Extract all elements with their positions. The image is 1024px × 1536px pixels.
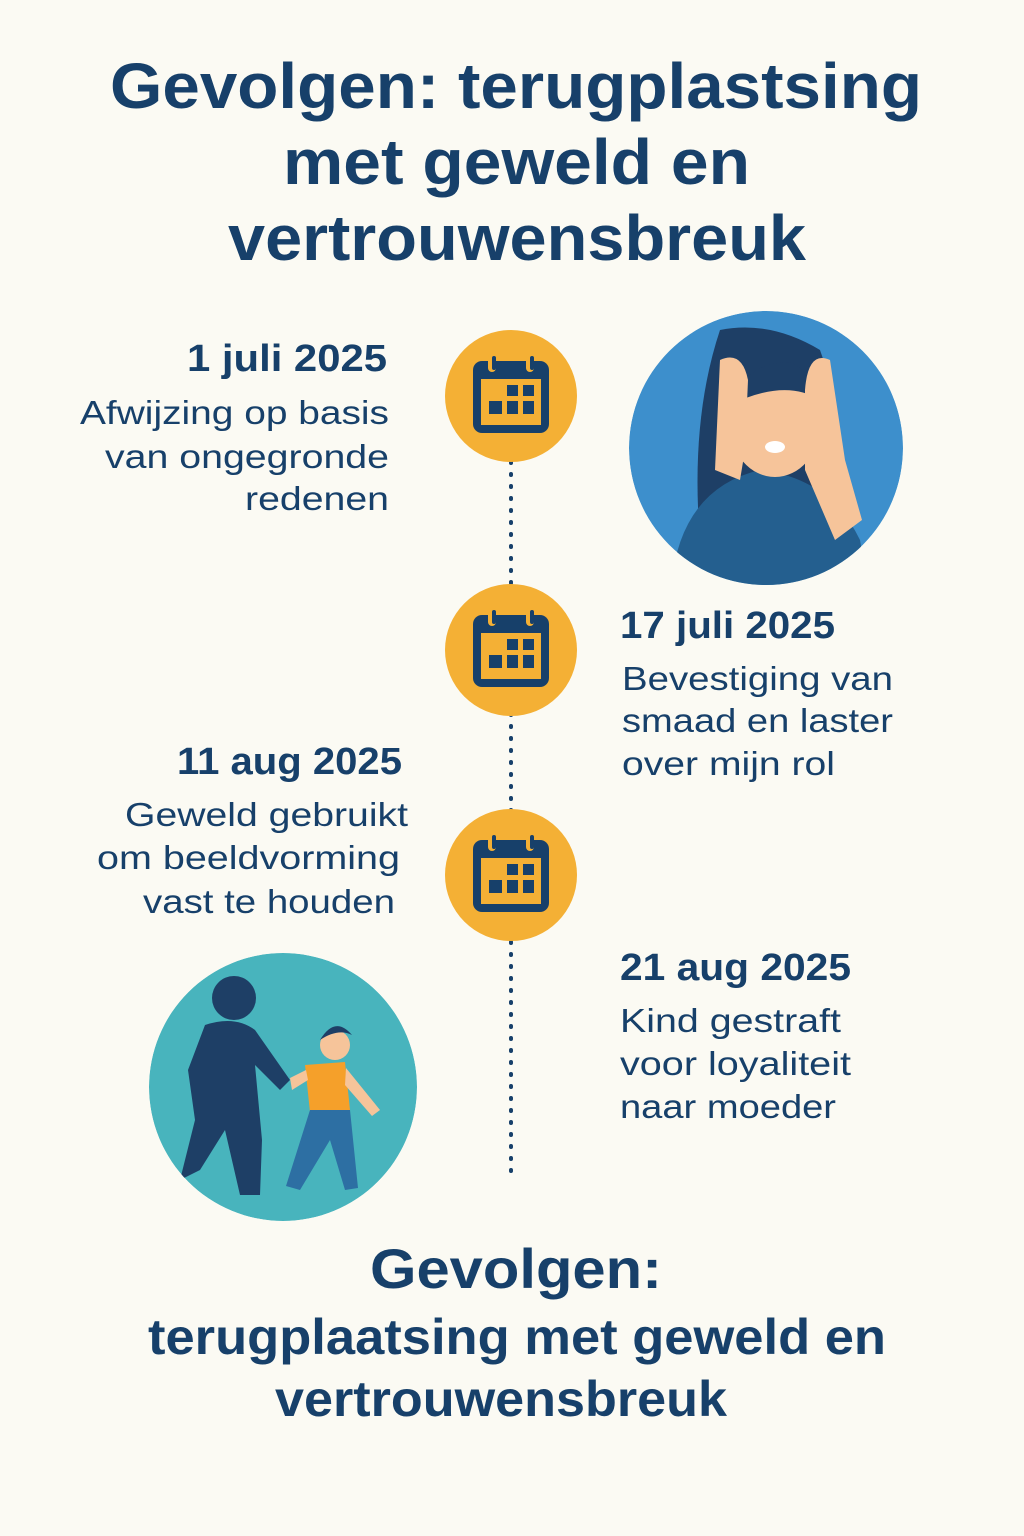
event: 1 juli 2025: van ongegronde	[105, 438, 389, 475]
event: 1 juli 2025: Afwijzing op basis	[80, 394, 389, 431]
event: 1 juli 2025: redenen	[245, 480, 389, 517]
event: 17 juli 2025: smaad en laster	[622, 702, 893, 739]
illustration: adult pulling child	[149, 953, 417, 1221]
event: 1 juli 2025: 1 juli 2025	[187, 338, 387, 380]
timeline dotted line	[509, 462, 513, 1172]
title: Gevolgen: terugplastsing	[110, 50, 922, 122]
event: 21 aug 2025	[620, 947, 851, 1125]
event: 17 juli 2025: 17 juli 2025	[620, 605, 835, 647]
illustration: distressed girl	[629, 311, 903, 600]
icon: calendar 2	[445, 584, 577, 716]
event: 11 aug 2025	[97, 741, 408, 920]
bottom summary: terugplaatsing met geweld en	[148, 1309, 886, 1365]
bottom summary: Gevolgen:	[370, 1237, 662, 1300]
bottom summary	[148, 1237, 886, 1427]
event: 21 aug 2025: Kind gestraft	[620, 1002, 841, 1039]
event: 11 aug 2025: om beeldvorming	[97, 839, 400, 876]
title: vertrouwensbreuk	[228, 202, 806, 274]
icon: calendar 1	[445, 330, 577, 462]
event: 17 juli 2025: Bevestiging van	[622, 660, 893, 697]
bottom summary: vertrouwensbreuk	[275, 1371, 727, 1427]
event: 21 aug 2025: naar moeder	[620, 1088, 836, 1125]
event: 11 aug 2025: Geweld gebruikt	[125, 796, 408, 833]
event: 11 aug 2025: 11 aug 2025	[177, 741, 402, 783]
icon: calendar 3	[445, 809, 577, 941]
event: 21 aug 2025: 21 aug 2025	[620, 947, 851, 989]
event: 17 juli 2025: over mijn rol	[622, 745, 835, 782]
title	[110, 50, 922, 274]
event: 11 aug 2025: vast te houden	[143, 883, 395, 920]
event: 17 juli 2025	[620, 605, 893, 782]
event: 21 aug 2025: voor loyaliteit	[620, 1045, 851, 1082]
title: met geweld en	[283, 126, 750, 198]
event: 1 juli 2025	[80, 338, 389, 517]
